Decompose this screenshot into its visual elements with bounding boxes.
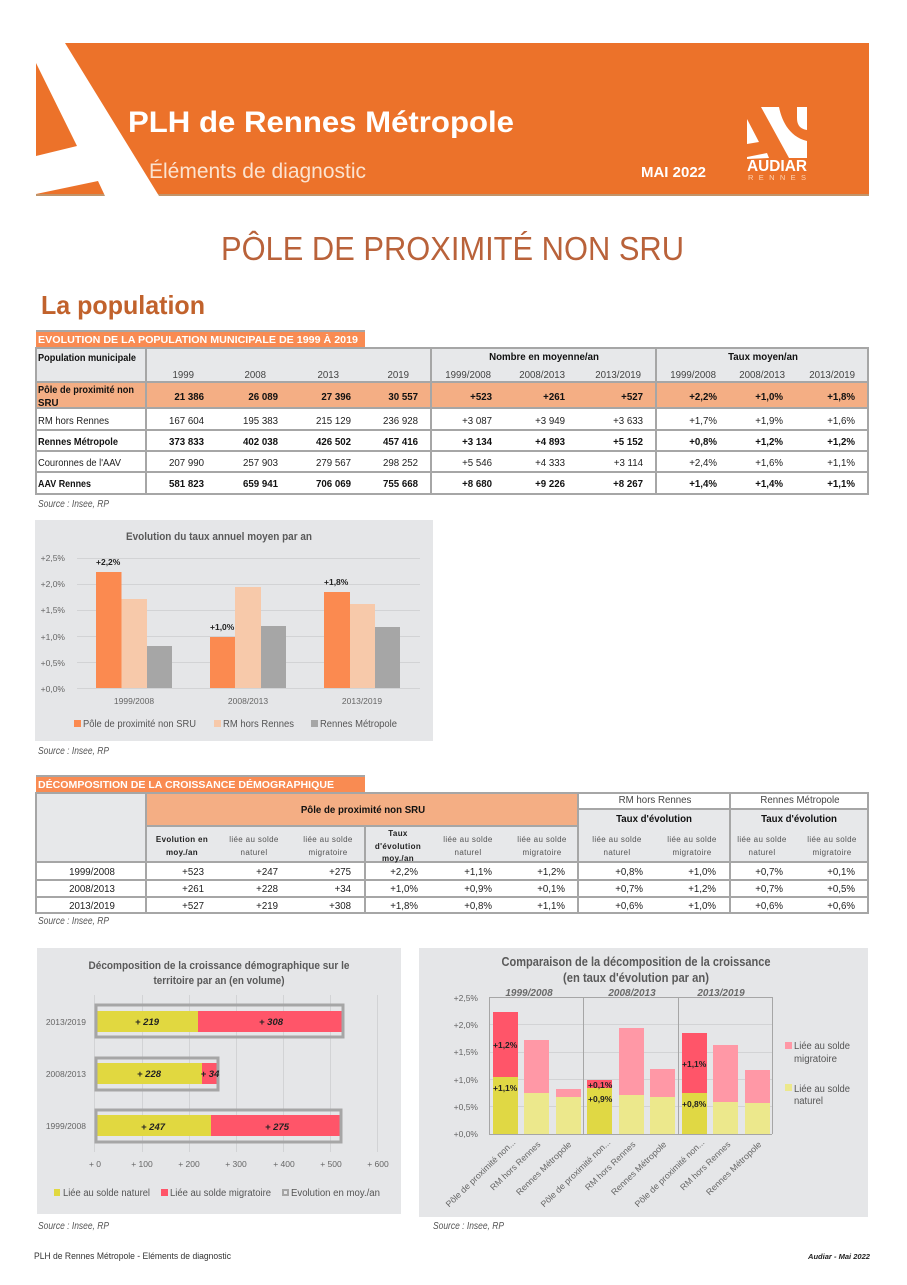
source note: Source : Insee, RP bbox=[38, 499, 109, 510]
column sub-headers: migratoire bbox=[672, 848, 712, 857]
rotated category labels: Rennes Métropole bbox=[704, 1139, 764, 1197]
row: 2013/2019: 2013/2019 bbox=[69, 901, 115, 912]
row: 1999/2008: +275 bbox=[329, 867, 351, 878]
y axis labels: +1,5% bbox=[41, 605, 65, 615]
x axis labels: + 200 bbox=[178, 1159, 200, 1169]
column sub-headers: liée au solde bbox=[229, 835, 279, 844]
legend: migratoire bbox=[794, 1054, 837, 1065]
row: pole de proximite: 27 396 bbox=[321, 392, 352, 403]
y axis labels: +1,0% bbox=[454, 1075, 478, 1085]
header title: PLH de Rennes Métropole bbox=[128, 106, 514, 139]
y axis labels: +0,5% bbox=[41, 658, 65, 668]
logo: Audiar Rennes: AUDIAR bbox=[747, 158, 807, 175]
group headers: RM hors Rennes bbox=[619, 795, 691, 806]
row: Couronnes de l'AAV: 279 567 bbox=[316, 458, 351, 469]
row: pole de proximite: +261 bbox=[543, 392, 566, 403]
row: pole de proximite: +1,8% bbox=[827, 392, 855, 403]
row: 2008/2013: +0,7% bbox=[615, 884, 643, 895]
y axis labels: +0,5% bbox=[454, 1102, 478, 1112]
rotated category labels: Rennes Métropole bbox=[609, 1139, 669, 1197]
source note: Source : Insee, RP bbox=[38, 746, 109, 757]
category labels bbox=[114, 696, 382, 706]
table header row: 2008/2013 bbox=[739, 370, 785, 381]
row: 1999/2008: +1,2% bbox=[537, 867, 565, 878]
column sub-headers: naturel bbox=[604, 848, 630, 857]
y axis labels: +2,5% bbox=[41, 553, 65, 563]
row: Couronnes de l'AAV: 207 990 bbox=[169, 458, 205, 469]
row: Rennes Metropole: +3 134 bbox=[462, 437, 493, 448]
x axis labels: + 300 bbox=[225, 1159, 247, 1169]
rotated category labels: Rennes Métropole bbox=[514, 1139, 574, 1197]
data labels: +0,1% bbox=[588, 1080, 613, 1090]
table heading: decomposition de la croissance: DÉCOMPOSITION DE LA CROISSANCE DÉMOGRAPHIQUE bbox=[38, 778, 334, 791]
y axis labels: +2,5% bbox=[454, 993, 478, 1003]
row: 2013/2019 bbox=[69, 901, 855, 912]
row: Couronnes de l'AAV: 257 903 bbox=[243, 458, 278, 469]
row: Rennes Metropole: +1,2% bbox=[827, 437, 855, 448]
table header row: Taux moyen/an bbox=[728, 352, 798, 363]
row: Couronnes de l'AAV: +5 546 bbox=[462, 458, 492, 469]
legend: Evolution en moy./an bbox=[291, 1188, 380, 1199]
chart title: Comparaison de la décomposition de la croissance bbox=[502, 955, 771, 969]
bars 1999/2008: + 275 bbox=[265, 1122, 290, 1133]
legend: Pôle de proximité non SRU bbox=[83, 719, 196, 730]
table heading: decomposition de la croissance bbox=[36, 775, 365, 792]
x axis labels: + 600 bbox=[367, 1159, 389, 1169]
row: RM hors Rennes: 236 928 bbox=[383, 416, 418, 427]
row: Couronnes de l'AAV: +3 114 bbox=[614, 458, 644, 469]
header banner bbox=[36, 43, 869, 196]
panel: comparison stacked chart bbox=[419, 948, 868, 1217]
row: pole de proximite: +1,0% bbox=[755, 392, 783, 403]
row: 2013/2019: +1,1% bbox=[537, 901, 565, 912]
row: pole de proximite: 21 386 bbox=[174, 392, 205, 403]
row: 1999/2008: +0,7% bbox=[755, 867, 783, 878]
rotated category labels: Pôle de proximité non... bbox=[444, 1137, 517, 1209]
row: AAV Rennes: +9 226 bbox=[535, 479, 566, 490]
row: 1999/2008: 1999/2008 bbox=[69, 867, 115, 878]
row: 2008/2013 bbox=[69, 884, 855, 895]
row: AAV Rennes: +8 267 bbox=[613, 479, 643, 490]
column sub-headers: moy./an bbox=[382, 854, 414, 863]
table header row: 1999/2008 bbox=[670, 370, 716, 381]
row: pole de proximite: 30 557 bbox=[388, 392, 418, 403]
group headers: Pôle de proximité non SRU bbox=[301, 805, 425, 816]
row: Couronnes de l'AAV: +1,6% bbox=[755, 458, 783, 469]
legend: Rennes Métropole bbox=[320, 719, 397, 730]
row: 1999/2008: +247 bbox=[256, 867, 278, 878]
row: RM hors Rennes: +3 087 bbox=[462, 416, 492, 427]
rotated category labels: RM hors Rennes bbox=[678, 1139, 732, 1192]
data labels: +0,8% bbox=[682, 1099, 707, 1109]
row: RM hors Rennes: +3 949 bbox=[535, 416, 565, 427]
row: AAV Rennes: +1,1% bbox=[827, 479, 855, 490]
row: RM hors Rennes: 215 129 bbox=[316, 416, 351, 427]
footer left: PLH de Rennes Métropole - Eléments de diagnostic bbox=[34, 1251, 231, 1261]
column sub-headers bbox=[156, 829, 857, 863]
data labels bbox=[493, 1040, 707, 1109]
x axis labels: + 400 bbox=[273, 1159, 295, 1169]
column sub-headers: liée au solde bbox=[303, 835, 353, 844]
table header row bbox=[38, 352, 855, 381]
row: Couronnes de l'AAV: +1,1% bbox=[827, 458, 855, 469]
bars bbox=[96, 572, 400, 688]
icon: large white A bbox=[36, 43, 159, 196]
column sub-headers: liée au solde bbox=[807, 835, 857, 844]
legend bbox=[785, 1041, 850, 1107]
data labels: +1,1% bbox=[682, 1059, 707, 1069]
legend: Liée au solde bbox=[794, 1041, 850, 1052]
row: pole de proximite: +527 bbox=[621, 392, 643, 403]
row: AAV Rennes: +1,4% bbox=[755, 479, 783, 490]
column sub-headers: naturel bbox=[241, 848, 267, 857]
row: AAV Rennes: 659 941 bbox=[243, 479, 279, 490]
rotated category labels: Pôle de proximité non... bbox=[633, 1137, 706, 1209]
row: pole de proximite: 26 089 bbox=[248, 392, 279, 403]
row: Rennes Metropole: 373 833 bbox=[169, 437, 205, 448]
bars 2008/2013: + 228 bbox=[137, 1069, 162, 1080]
row: 2013/2019: +527 bbox=[182, 901, 204, 912]
group headers: Rennes Métropole bbox=[760, 795, 840, 806]
row: Couronnes de l'AAV: Couronnes de l'AAV bbox=[38, 458, 122, 469]
chart title: Evolution du taux annuel moyen par an bbox=[126, 531, 312, 543]
chart title bbox=[88, 960, 350, 987]
row: 2013/2019: +1,8% bbox=[390, 901, 418, 912]
rotated category labels bbox=[444, 1137, 764, 1209]
row: Couronnes de l'AAV: +4 333 bbox=[535, 458, 565, 469]
column sub-headers: liée au solde bbox=[592, 835, 642, 844]
column sub-headers: liée au solde bbox=[517, 835, 567, 844]
row: RM hors Rennes: RM hors Rennes bbox=[38, 416, 109, 427]
period labels: 1999/2008 bbox=[505, 988, 553, 999]
data labels bbox=[96, 557, 349, 632]
row: 2013/2019: +308 bbox=[329, 901, 351, 912]
table header row: 2013/2019 bbox=[809, 370, 855, 381]
column sub-headers: d'évolution bbox=[375, 842, 421, 851]
row: 2008/2013: +228 bbox=[256, 884, 278, 895]
data labels: +1,2% bbox=[493, 1040, 518, 1050]
data labels: +2,2% bbox=[96, 557, 121, 567]
row: Rennes Metropole: Rennes Métropole bbox=[38, 437, 119, 448]
table header row: 2013 bbox=[317, 370, 339, 381]
bars 2013/2019: + 308 bbox=[259, 1017, 284, 1028]
bars 2008/2013: + 34 bbox=[201, 1069, 220, 1080]
row: 1999/2008: +2,2% bbox=[390, 867, 418, 878]
y axis labels bbox=[46, 1017, 86, 1131]
column sub-headers: liée au solde bbox=[443, 835, 493, 844]
row: RM hors Rennes: +1,7% bbox=[689, 416, 717, 427]
row: 2008/2013: +1,2% bbox=[688, 884, 716, 895]
table header row: 2013/2019 bbox=[595, 370, 641, 381]
chart title bbox=[502, 955, 771, 985]
row: RM hors Rennes: +3 633 bbox=[613, 416, 643, 427]
row: 2013/2019: +1,0% bbox=[688, 901, 716, 912]
data labels: +1,0% bbox=[210, 622, 235, 632]
rotated category labels: RM hors Rennes bbox=[488, 1139, 542, 1192]
table header row: 2019 bbox=[387, 370, 409, 381]
row: RM hors Rennes: +1,9% bbox=[755, 416, 783, 427]
column sub-headers: moy./an bbox=[166, 848, 198, 857]
page title: PÔLE DE PROXIMITÉ NON SRU bbox=[221, 230, 684, 267]
y axis labels bbox=[454, 993, 478, 1139]
table header row: Population municipale bbox=[38, 353, 137, 364]
y axis labels: +2,0% bbox=[41, 579, 65, 589]
y axis labels: +1,5% bbox=[454, 1047, 478, 1057]
row: AAV Rennes: 581 823 bbox=[169, 479, 205, 490]
chart title: Décomposition de la croissance démographique sur le bbox=[88, 960, 350, 972]
row: 1999/2008 bbox=[69, 867, 855, 878]
row: Rennes Metropole: +4 893 bbox=[535, 437, 566, 448]
y axis labels: +2,0% bbox=[454, 1020, 478, 1030]
legend: Liée au solde naturel bbox=[63, 1188, 150, 1199]
category labels: 1999/2008 bbox=[114, 696, 154, 706]
bars 2008/2013 bbox=[96, 1058, 220, 1090]
x axis labels: + 0 bbox=[89, 1159, 101, 1169]
row: 2008/2013: +34 bbox=[335, 884, 352, 895]
column sub-headers: liée au solde bbox=[667, 835, 717, 844]
row: AAV Rennes: AAV Rennes bbox=[38, 479, 91, 490]
y axis labels bbox=[41, 553, 65, 694]
row: 2013/2019: +0,6% bbox=[755, 901, 783, 912]
stacked bars bbox=[493, 1012, 770, 1134]
bars 1999/2008: + 247 bbox=[141, 1122, 166, 1133]
group headers: Taux d'évolution bbox=[761, 814, 837, 825]
data labels: +1,8% bbox=[324, 577, 349, 587]
data labels: +1,1% bbox=[493, 1083, 518, 1093]
footer right: Audiar - Mai 2022 bbox=[807, 1252, 871, 1261]
row: AAV Rennes: 706 069 bbox=[316, 479, 352, 490]
row: Rennes Metropole: +5 152 bbox=[613, 437, 643, 448]
row: Couronnes de l'AAV: 298 252 bbox=[383, 458, 418, 469]
table header row: 2008/2013 bbox=[519, 370, 565, 381]
column sub-headers: Taux bbox=[388, 829, 408, 838]
row: 2008/2013: 2008/2013 bbox=[69, 884, 115, 895]
row: Couronnes de l'AAV bbox=[38, 458, 855, 469]
row: AAV Rennes: +8 680 bbox=[462, 479, 492, 490]
y axis labels: +0,0% bbox=[454, 1129, 478, 1139]
table: decomposition bbox=[35, 792, 869, 914]
row: 2008/2013: +0,5% bbox=[827, 884, 855, 895]
row: 2008/2013: +261 bbox=[182, 884, 204, 895]
legend bbox=[74, 719, 397, 730]
legend: naturel bbox=[794, 1096, 823, 1107]
rotated category labels: RM hors Rennes bbox=[583, 1139, 637, 1192]
section heading: la population: La population bbox=[41, 290, 205, 320]
y axis labels: +1,0% bbox=[41, 632, 65, 642]
source note: Source : Insee, RP bbox=[433, 1221, 504, 1232]
column sub-headers: naturel bbox=[749, 848, 775, 857]
row: 1999/2008: +0,1% bbox=[827, 867, 855, 878]
source note: Source : Insee, RP bbox=[38, 916, 109, 927]
column sub-headers: migratoire bbox=[812, 848, 852, 857]
legend: Liée au solde bbox=[794, 1084, 850, 1095]
source note: Source : Insee, RP bbox=[38, 1221, 109, 1232]
category labels: 2013/2019 bbox=[342, 696, 382, 706]
row: Rennes Metropole: 402 038 bbox=[243, 437, 279, 448]
y axis labels: +0,0% bbox=[41, 684, 65, 694]
logo: Audiar Rennes bbox=[747, 107, 807, 182]
row: Rennes Metropole: 457 416 bbox=[383, 437, 419, 448]
column sub-headers: migratoire bbox=[308, 848, 348, 857]
row: pole de proximite: +2,2% bbox=[689, 392, 717, 403]
row: pole de proximite: Pôle de proximité non bbox=[38, 385, 134, 396]
row: RM hors Rennes bbox=[38, 416, 855, 427]
row: pole de proximite bbox=[38, 385, 855, 409]
category labels: 2008/2013 bbox=[228, 696, 268, 706]
period labels bbox=[505, 988, 745, 999]
column sub-headers: Evolution en bbox=[156, 835, 208, 844]
row: Rennes Metropole: +0,8% bbox=[689, 437, 717, 448]
group headers bbox=[301, 795, 840, 825]
row: 2008/2013: +0,1% bbox=[537, 884, 565, 895]
row: Rennes Metropole: +1,2% bbox=[755, 437, 783, 448]
table header row: 2008 bbox=[244, 370, 266, 381]
column sub-headers: naturel bbox=[455, 848, 481, 857]
x axis labels bbox=[89, 1159, 389, 1169]
row: 2013/2019: +219 bbox=[256, 901, 278, 912]
table heading: evolution de la population: EVOLUTION DE LA POPULATION MUNICIPALE DE 1999 À 2019 bbox=[38, 333, 358, 346]
group headers: Taux d'évolution bbox=[616, 814, 692, 825]
table header row: 1999/2008 bbox=[445, 370, 491, 381]
row: RM hors Rennes: 167 604 bbox=[169, 416, 205, 427]
header date: MAI 2022 bbox=[641, 165, 706, 181]
period labels: 2008/2013 bbox=[607, 988, 656, 999]
legend: Liée au solde migratoire bbox=[170, 1188, 271, 1199]
data labels: +0,9% bbox=[588, 1094, 613, 1104]
column sub-headers: liée au solde bbox=[737, 835, 787, 844]
row: 1999/2008: +1,0% bbox=[688, 867, 716, 878]
row: 2008/2013: +0,9% bbox=[464, 884, 492, 895]
bars 1999/2008 bbox=[96, 1110, 341, 1142]
table header row: Nombre en moyenne/an bbox=[489, 352, 599, 363]
row: RM hors Rennes: 195 383 bbox=[243, 416, 278, 427]
y axis labels: 2013/2019 bbox=[46, 1017, 86, 1027]
row: AAV Rennes: 755 668 bbox=[383, 479, 419, 490]
row: 2008/2013: +1,0% bbox=[390, 884, 418, 895]
row: AAV Rennes: +1,4% bbox=[689, 479, 717, 490]
panel: horizontal stacked chart in volume bbox=[37, 948, 401, 1214]
period labels: 2013/2019 bbox=[696, 988, 745, 999]
row: 1999/2008: +0,8% bbox=[615, 867, 643, 878]
chart title: (en taux d'évolution par an) bbox=[563, 971, 709, 985]
table heading: evolution de la population bbox=[36, 330, 365, 347]
row: 2013/2019: +0,8% bbox=[464, 901, 492, 912]
header subtitle: Éléments de diagnostic bbox=[149, 160, 366, 183]
x axis labels: + 100 bbox=[131, 1159, 153, 1169]
row: 2013/2019: +0,6% bbox=[827, 901, 855, 912]
chart title: territoire par an (en volume) bbox=[154, 975, 285, 987]
y axis labels: 1999/2008 bbox=[46, 1121, 86, 1131]
x axis labels: + 500 bbox=[320, 1159, 342, 1169]
row: Rennes Metropole: 426 502 bbox=[316, 437, 351, 448]
row: RM hors Rennes: +1,6% bbox=[827, 416, 855, 427]
row: 2013/2019: +0,6% bbox=[615, 901, 643, 912]
bars 2013/2019 bbox=[96, 1005, 343, 1037]
panel: bar chart evolution du taux annuel bbox=[35, 520, 433, 741]
bars 2013/2019: + 219 bbox=[135, 1017, 160, 1028]
column sub-headers: migratoire bbox=[522, 848, 562, 857]
table header row: 1999 bbox=[172, 370, 194, 381]
row: Rennes Metropole bbox=[38, 437, 855, 448]
row: pole de proximite: SRU bbox=[38, 398, 58, 409]
y axis labels: 2008/2013 bbox=[46, 1069, 86, 1079]
legend: RM hors Rennes bbox=[223, 719, 294, 730]
row: 1999/2008: +1,1% bbox=[464, 867, 492, 878]
rotated category labels: Pôle de proximité non... bbox=[539, 1137, 612, 1209]
logo: Audiar Rennes: RENNES bbox=[748, 173, 806, 182]
row: pole de proximite: +523 bbox=[470, 392, 493, 403]
table: population municipale bbox=[35, 347, 869, 495]
row: 2008/2013: +0,7% bbox=[755, 884, 783, 895]
row: Couronnes de l'AAV: +2,4% bbox=[689, 458, 717, 469]
row: AAV Rennes bbox=[38, 479, 855, 490]
legend bbox=[54, 1188, 380, 1199]
row: 1999/2008: +523 bbox=[182, 867, 204, 878]
